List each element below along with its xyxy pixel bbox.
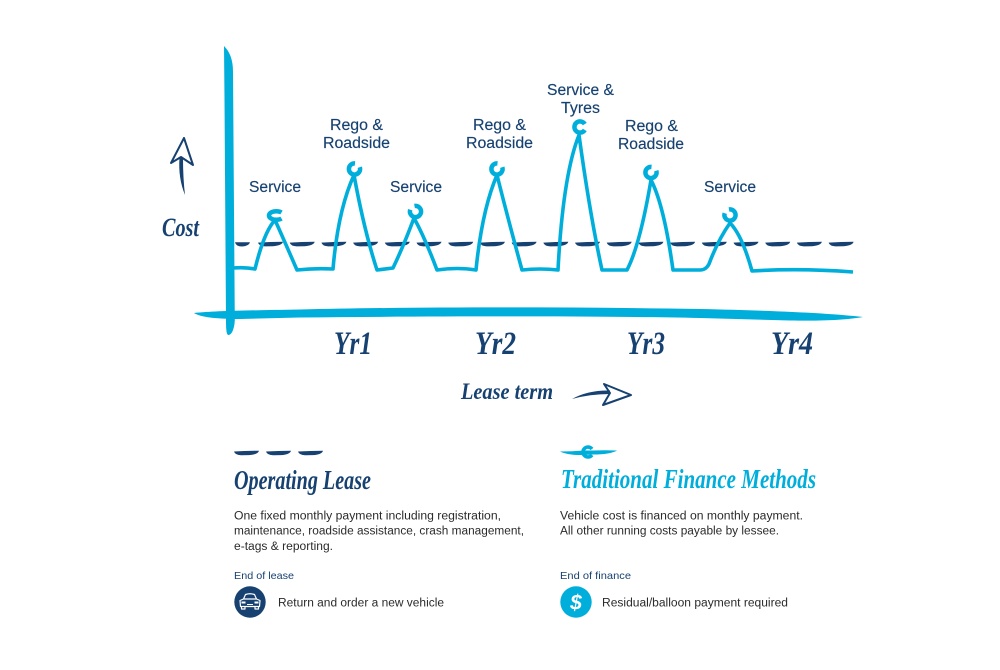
description: maintenance, roadside assistance, crash management,: [234, 526, 524, 538]
peak labels: Roadside: [466, 135, 533, 152]
legend: dashed line: [234, 451, 323, 455]
heading: Traditional Finance Methods: [561, 464, 816, 494]
description: e-tags & reporting.: [234, 541, 333, 553]
description: All other running costs payable by lessee.: [560, 526, 779, 538]
peak labels: Service &: [547, 82, 615, 99]
cost axis label: Cost: [162, 213, 200, 242]
peak labels: Service: [249, 179, 301, 196]
description: One fixed monthly payment including registration,: [234, 510, 501, 522]
peak labels: Roadside: [618, 136, 684, 153]
peak labels: [249, 82, 756, 196]
end of lease label: End of lease: [234, 570, 294, 582]
year labels: [334, 326, 813, 362]
panel: traditional finance methods: [560, 447, 816, 618]
icon: cost up arrow: [171, 138, 193, 195]
description: Vehicle cost is financed on monthly payment.: [560, 510, 803, 522]
traditional finance spiked line: [233, 135, 853, 272]
description: [560, 510, 803, 538]
residual text: Residual/balloon payment required: [602, 598, 788, 610]
operating lease dashed line: [235, 242, 854, 246]
lease term axis label: Lease term: [460, 379, 553, 404]
peak labels: Rego &: [625, 118, 679, 135]
year labels: Yr2: [475, 326, 516, 362]
peak labels: Rego &: [330, 117, 384, 134]
year labels: Yr4: [771, 326, 813, 362]
heading: Operating Lease: [234, 465, 371, 495]
legend: solid line with ring: [560, 447, 617, 457]
peak labels: Tyres: [561, 100, 600, 117]
return text: Return and order a new vehicle: [278, 598, 444, 610]
year labels: Yr3: [627, 326, 665, 362]
chart: cost over lease term: [162, 46, 863, 405]
peak labels: Rego &: [473, 117, 527, 134]
end of finance label: End of finance: [560, 570, 631, 582]
icon: car: [234, 586, 266, 618]
icon: dollar: $: [569, 592, 582, 614]
peak labels: Service: [704, 179, 756, 196]
icon: dollar: [560, 586, 592, 618]
year labels: Yr1: [334, 326, 372, 362]
icon: lease term arrow: [572, 384, 631, 405]
peak rings: [269, 121, 736, 221]
description: [234, 510, 524, 553]
x axis: [194, 307, 863, 321]
peak labels: Roadside: [323, 135, 390, 152]
peak labels: Service: [390, 179, 442, 196]
y axis: [224, 46, 235, 335]
panel: operating lease: [234, 451, 524, 618]
